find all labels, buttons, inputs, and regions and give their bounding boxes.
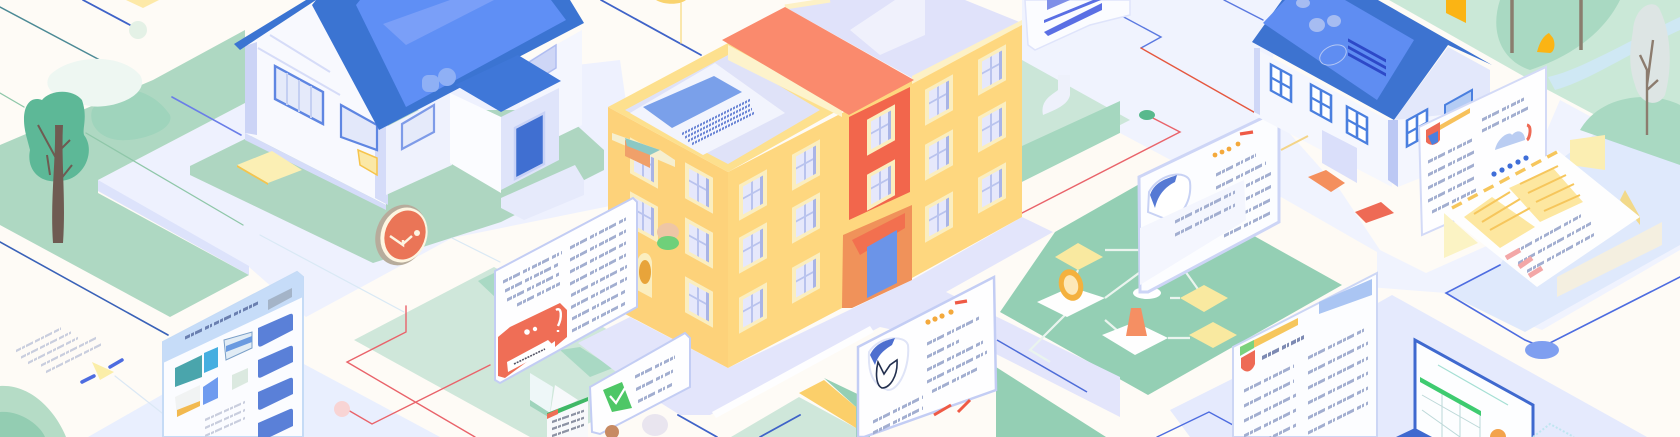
header dashes bbox=[1452, 152, 1557, 208]
top yellow sheet bbox=[126, 0, 159, 8]
shield icon bbox=[1241, 350, 1255, 371]
card: checklist, lower right bbox=[1233, 273, 1377, 437]
right house bbox=[1252, 0, 1492, 223]
card: speech bubble bbox=[495, 198, 637, 383]
left window bbox=[275, 66, 323, 124]
red tower bbox=[849, 87, 910, 220]
awning clutter bbox=[612, 133, 675, 168]
rating dots bbox=[1213, 142, 1240, 157]
panel circles bbox=[422, 68, 456, 92]
right wing wall bbox=[910, 23, 1022, 278]
top card bbox=[1025, 0, 1130, 50]
lawn: dark patch left of card bbox=[478, 272, 496, 298]
panel blue buttons bbox=[258, 314, 293, 437]
yellow square bbox=[1446, 0, 1466, 23]
yellow sign bbox=[358, 150, 377, 175]
lawn: left house bbox=[190, 110, 604, 263]
orange dot bbox=[1490, 429, 1506, 437]
main roof bbox=[312, 0, 584, 130]
small open book bbox=[530, 373, 588, 437]
open book bbox=[1444, 135, 1662, 297]
card: checklist bbox=[590, 333, 690, 434]
panel ovals bbox=[1296, 0, 1341, 32]
side windows bbox=[1406, 108, 1428, 148]
right wing roof bbox=[785, 0, 1022, 78]
door bbox=[867, 230, 897, 298]
tower wall bbox=[842, 80, 912, 308]
check text bbox=[635, 357, 675, 403]
shield icon bbox=[1426, 122, 1440, 145]
ramp bbox=[1281, 136, 1308, 150]
red marks bbox=[1506, 250, 1542, 276]
speech icon bbox=[498, 303, 567, 378]
roof bbox=[1252, 0, 1492, 120]
meadow: top right bbox=[1389, 0, 1680, 165]
block stripes bbox=[1474, 166, 1580, 230]
rating dots bbox=[925, 309, 954, 325]
tree bbox=[24, 92, 89, 243]
calendar grid bbox=[1422, 392, 1480, 437]
back wall bbox=[520, 30, 582, 155]
yellow mat on lawn bbox=[237, 151, 302, 185]
gable bbox=[1394, 47, 1490, 120]
panel title bbox=[185, 303, 258, 338]
check icon bbox=[603, 382, 632, 412]
siding lines bbox=[258, 35, 340, 95]
clock bbox=[367, 197, 435, 273]
porch roof bbox=[455, 55, 561, 112]
teal dashed line bbox=[1533, 424, 1574, 437]
arched window with round sign bbox=[637, 253, 652, 298]
panel tiles bbox=[175, 355, 202, 387]
back window bbox=[526, 45, 556, 84]
text left bbox=[1244, 365, 1296, 437]
book on roof bbox=[850, 0, 925, 55]
card: tooth, right bbox=[1133, 110, 1279, 299]
windows bbox=[1270, 63, 1292, 103]
left wall windows bbox=[685, 162, 713, 214]
header bands bbox=[1240, 318, 1298, 355]
yellow text block right bbox=[1509, 168, 1583, 222]
small note lines bbox=[16, 308, 102, 387]
tooth icon bbox=[1148, 175, 1190, 220]
porch walls bbox=[450, 93, 501, 193]
burger bbox=[657, 223, 679, 250]
centre wall bbox=[728, 113, 842, 368]
yellow bird bbox=[1537, 33, 1554, 53]
text lines bbox=[927, 314, 987, 394]
roof left band bbox=[234, 0, 316, 50]
text bbox=[1428, 138, 1476, 214]
lawn: pale green centre lot bbox=[354, 267, 690, 437]
meadow trees bbox=[1446, 0, 1670, 135]
yellow text block left bbox=[1464, 197, 1535, 248]
lawn: lower centre bbox=[824, 378, 870, 437]
road bevel bbox=[98, 180, 249, 275]
sock ornament bbox=[1043, 75, 1070, 115]
blue dots bbox=[1491, 155, 1529, 177]
panel coin bbox=[1317, 41, 1349, 69]
book text bbox=[1515, 208, 1595, 278]
left roof bbox=[608, 43, 842, 172]
mini chart bbox=[1495, 131, 1525, 150]
panel strip bbox=[383, 0, 494, 45]
middle window bbox=[341, 105, 377, 150]
lawn: darker strip beside card bbox=[560, 347, 613, 377]
overlapping panel bbox=[1140, 180, 1246, 285]
lawn: network lot bbox=[1000, 178, 1342, 395]
heading bbox=[1262, 337, 1304, 358]
right text column bbox=[570, 218, 627, 332]
tag bbox=[1355, 202, 1394, 223]
card: tooth, centre bbox=[858, 277, 996, 437]
small figure bbox=[605, 414, 668, 437]
right window bbox=[402, 105, 434, 149]
left house bbox=[234, 0, 584, 220]
network nodes bbox=[1030, 243, 1237, 362]
lawn: upper right of building bbox=[1022, 60, 1130, 175]
hill bottom left bbox=[0, 386, 66, 437]
green lawn: left lot bbox=[0, 30, 249, 317]
solar panel bbox=[356, 0, 566, 107]
right wall bbox=[386, 93, 452, 195]
solar panel bbox=[1263, 0, 1414, 100]
laptop with calendar bbox=[1396, 338, 1574, 437]
panel header mini bars bbox=[268, 288, 292, 310]
right wing windows bbox=[925, 74, 953, 126]
cream strip bbox=[1022, 133, 1180, 250]
corner column bbox=[245, 42, 257, 135]
lawn: upper right of building, darker part bbox=[1022, 101, 1120, 182]
steps bbox=[501, 165, 584, 220]
portal bbox=[842, 205, 912, 308]
red roof bbox=[722, 7, 914, 115]
header band bbox=[1440, 108, 1470, 130]
laptop base bbox=[1396, 428, 1432, 437]
lawn: lower right of tooth card bbox=[996, 367, 1106, 437]
building platform bbox=[578, 217, 1120, 418]
platform stripe line bbox=[997, 340, 1087, 392]
gable wall bbox=[245, 4, 386, 205]
panel lines bbox=[1348, 40, 1386, 75]
small arrow and dashes bbox=[82, 360, 122, 382]
connector dots bbox=[129, 21, 1559, 417]
door bbox=[515, 113, 544, 179]
lawn: pale lower centre bbox=[731, 397, 856, 437]
rooftop laptop bbox=[630, 63, 785, 155]
green bar bbox=[1420, 377, 1481, 416]
text lines bbox=[1216, 148, 1271, 240]
yellow path bbox=[799, 380, 856, 428]
mat bbox=[1308, 170, 1345, 192]
tower windows bbox=[867, 104, 895, 156]
tooth icon bbox=[869, 338, 908, 390]
grey tree bbox=[1630, 4, 1670, 103]
dashboard panel bbox=[163, 272, 303, 437]
door bbox=[1322, 130, 1357, 183]
centre windows bbox=[739, 169, 767, 221]
apartment building bbox=[608, 0, 1022, 368]
left wall bbox=[608, 107, 728, 368]
card post bbox=[1133, 287, 1161, 299]
fog hill behind tree bbox=[47, 59, 170, 140]
card: dental notes, upper right bbox=[1419, 67, 1546, 235]
top yellow sun bbox=[656, 0, 686, 4]
text right bbox=[1308, 328, 1368, 433]
left text column bbox=[503, 252, 562, 312]
